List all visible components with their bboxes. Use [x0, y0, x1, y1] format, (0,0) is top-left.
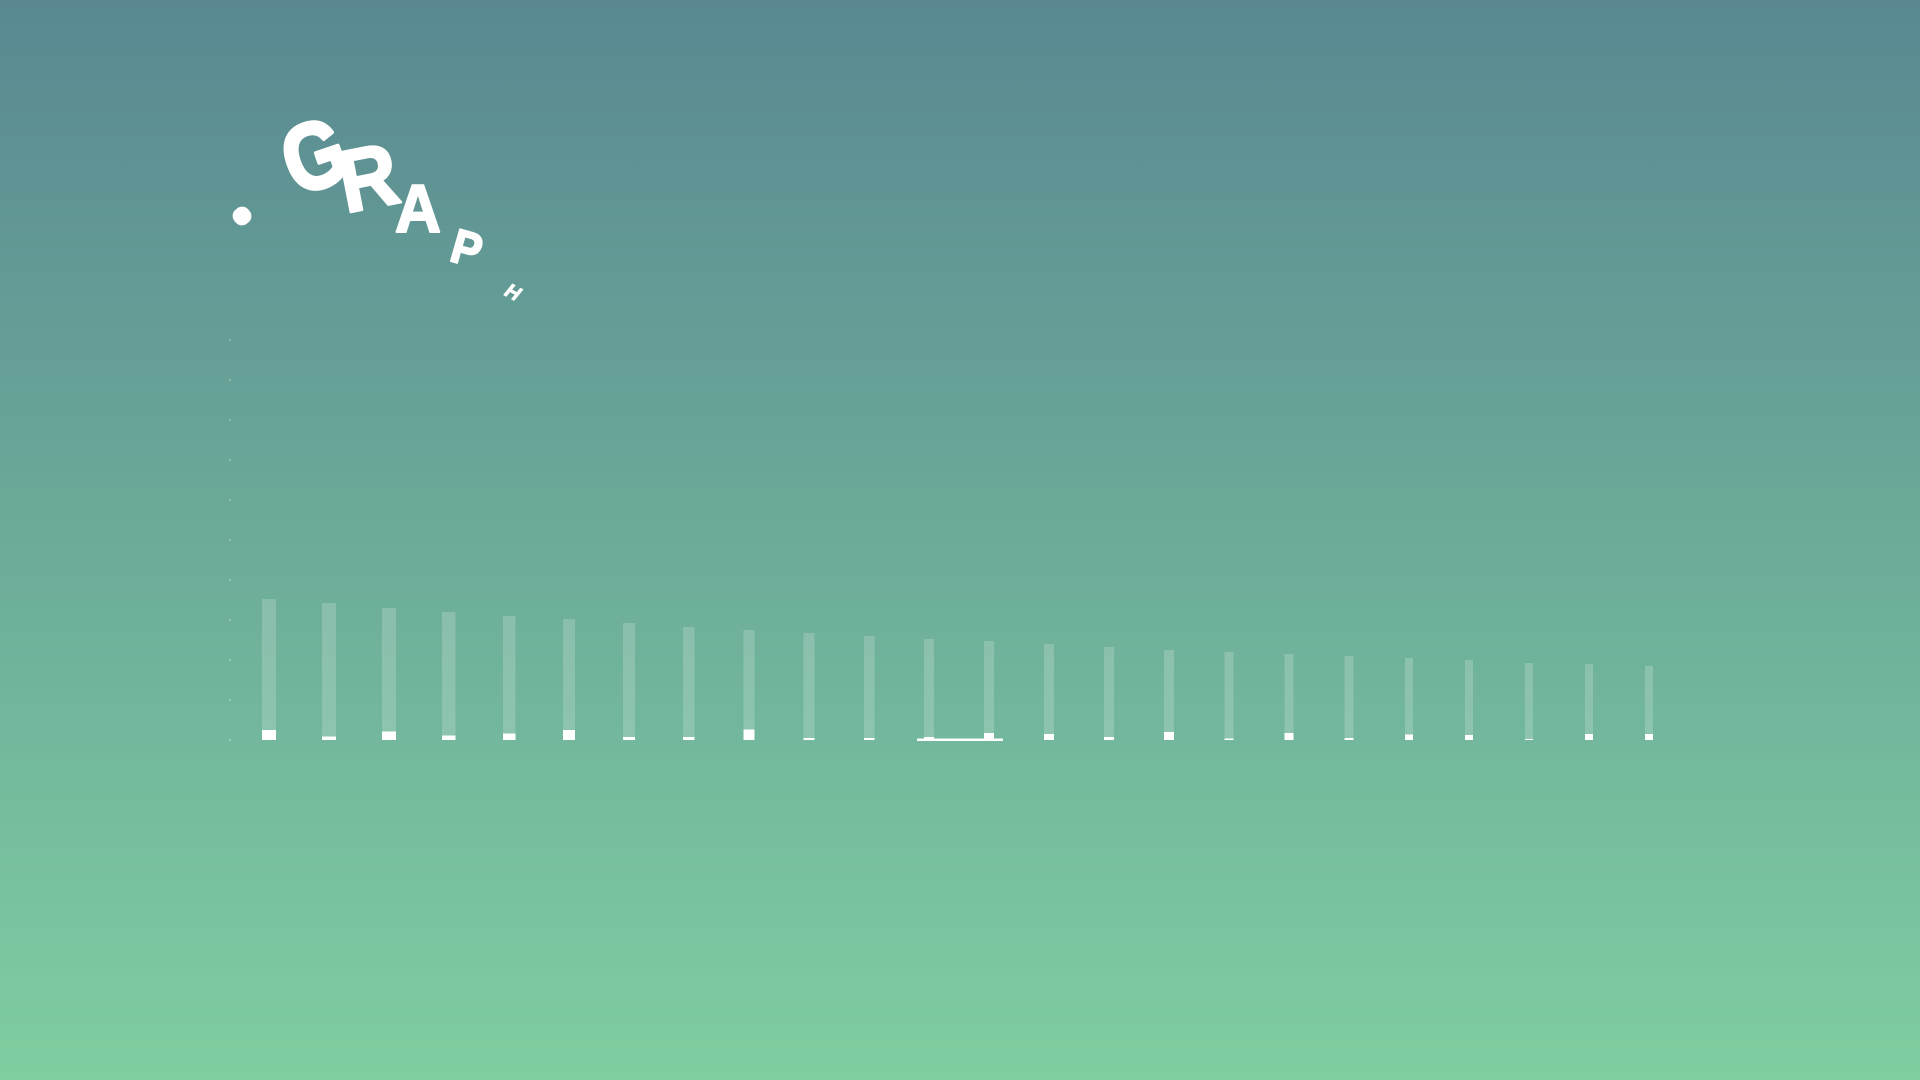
- baseline segment: [917, 738, 1003, 741]
- bar chart: white value caps: [262, 730, 1653, 740]
- title letter A: A: [395, 170, 441, 246]
- icon: title dot: [229, 203, 255, 229]
- title letter P: P: [445, 218, 489, 278]
- bar chart: pale columns: [262, 599, 1653, 740]
- title letter R: R: [330, 123, 406, 231]
- title: animated GRAPH letters: [229, 96, 525, 306]
- y axis dots: [229, 339, 231, 741]
- title letter H: H: [501, 280, 525, 306]
- title letter G: G: [268, 96, 360, 216]
